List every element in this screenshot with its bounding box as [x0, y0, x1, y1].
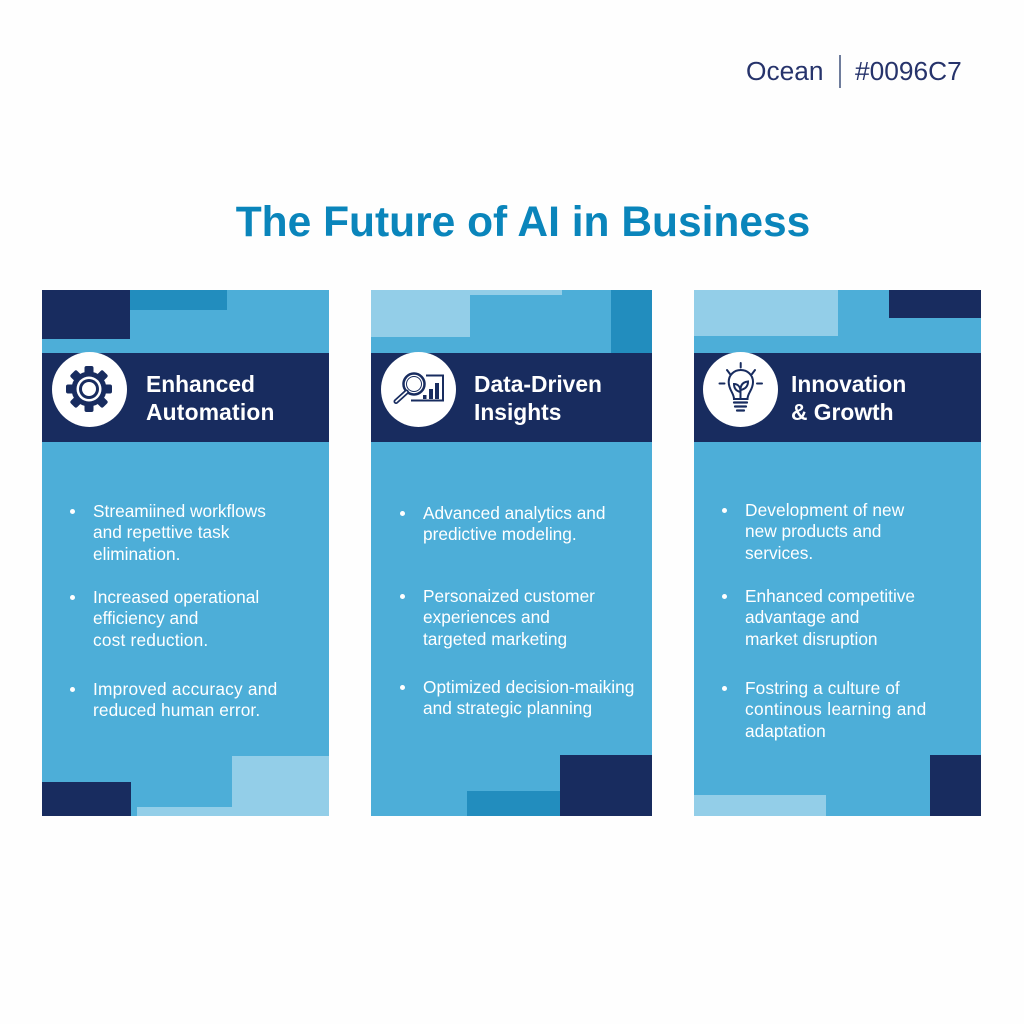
bullet list: Data-Driven Insights: Optimized decision-maiking: [423, 676, 634, 696]
bullet list: Innovation & Growth: new products and: [745, 521, 881, 541]
bullet list: Enhanced Automation: Improved accuracy and: [93, 678, 277, 698]
panel: Data-Driven Insights background: [371, 290, 652, 816]
icon: magnifier over chart: [381, 352, 456, 427]
bullet list: Innovation & Growth: services.: [745, 542, 813, 562]
heading: Innovation & Growth: [791, 371, 906, 424]
bullet list: Data-Driven Insights: experiences and: [423, 607, 550, 627]
heading: Data-Driven Insights: [474, 371, 602, 425]
bullet list: Data-Driven Insights: predictive modeling.: [423, 524, 577, 544]
panel: Enhanced Automation background: [42, 290, 329, 816]
heading: Enhanced Automation: Enhanced: [146, 371, 255, 397]
heading: Data-Driven Insights: Insights: [474, 398, 561, 424]
bullet list: Data-Driven Insights: Advanced analytics and: [423, 502, 606, 522]
icon: light bulb with leaf: [703, 352, 778, 427]
icon: gear: [52, 352, 127, 427]
bullet list: Enhanced Automation: cost reduction.: [93, 630, 208, 650]
bullet list: Data-Driven Insights: Personaized customer: [423, 586, 595, 606]
bullet list: Data-Driven Insights: and strategic planning: [423, 698, 592, 718]
bullet list: Innovation & Growth: advantage and: [745, 607, 859, 627]
title: The Future of AI in Business: [236, 199, 810, 246]
panel: Innovation & Growth background: [694, 290, 981, 816]
palette label: [746, 55, 962, 88]
bullet list: Enhanced Automation: and repettive task: [93, 522, 229, 542]
bullet list: Innovation & Growth: adaptation: [745, 720, 826, 740]
palette label: #0096C7: [855, 56, 962, 86]
bullet list: Data-Driven Insights: targeted marketing: [423, 628, 567, 648]
heading: Innovation & Growth: Innovation: [791, 371, 906, 397]
bullet list: Enhanced Automation: reduced human error.: [93, 700, 260, 720]
bullet list: Enhanced Automation: Streamiined workflows: [93, 500, 266, 520]
bullet list: Innovation & Growth: [722, 500, 927, 740]
bullet list: Enhanced Automation: efficiency and: [93, 608, 198, 628]
bullet list: Innovation & Growth: Fostring a culture of: [745, 678, 900, 698]
heading: Data-Driven Insights: Data-Driven: [474, 371, 602, 397]
bullet list: Innovation & Growth: Enhanced competitive: [745, 586, 915, 606]
bullet list: Innovation & Growth: continous learning and: [745, 699, 927, 719]
heading: Enhanced Automation: [146, 371, 275, 424]
palette label: Ocean: [746, 56, 823, 86]
bullet list: Innovation & Growth: market disruption: [745, 628, 878, 648]
bullet list: Enhanced Automation: [70, 500, 277, 720]
heading: Innovation & Growth: & Growth: [791, 398, 894, 424]
bullet list: Data-Driven Insights: [400, 502, 634, 718]
bullet list: Innovation & Growth: Development of new: [745, 500, 904, 520]
bullet list: Enhanced Automation: Increased operational: [93, 586, 259, 606]
heading: Enhanced Automation: Automation: [146, 398, 275, 424]
bullet list: Enhanced Automation: elimination.: [93, 544, 180, 564]
